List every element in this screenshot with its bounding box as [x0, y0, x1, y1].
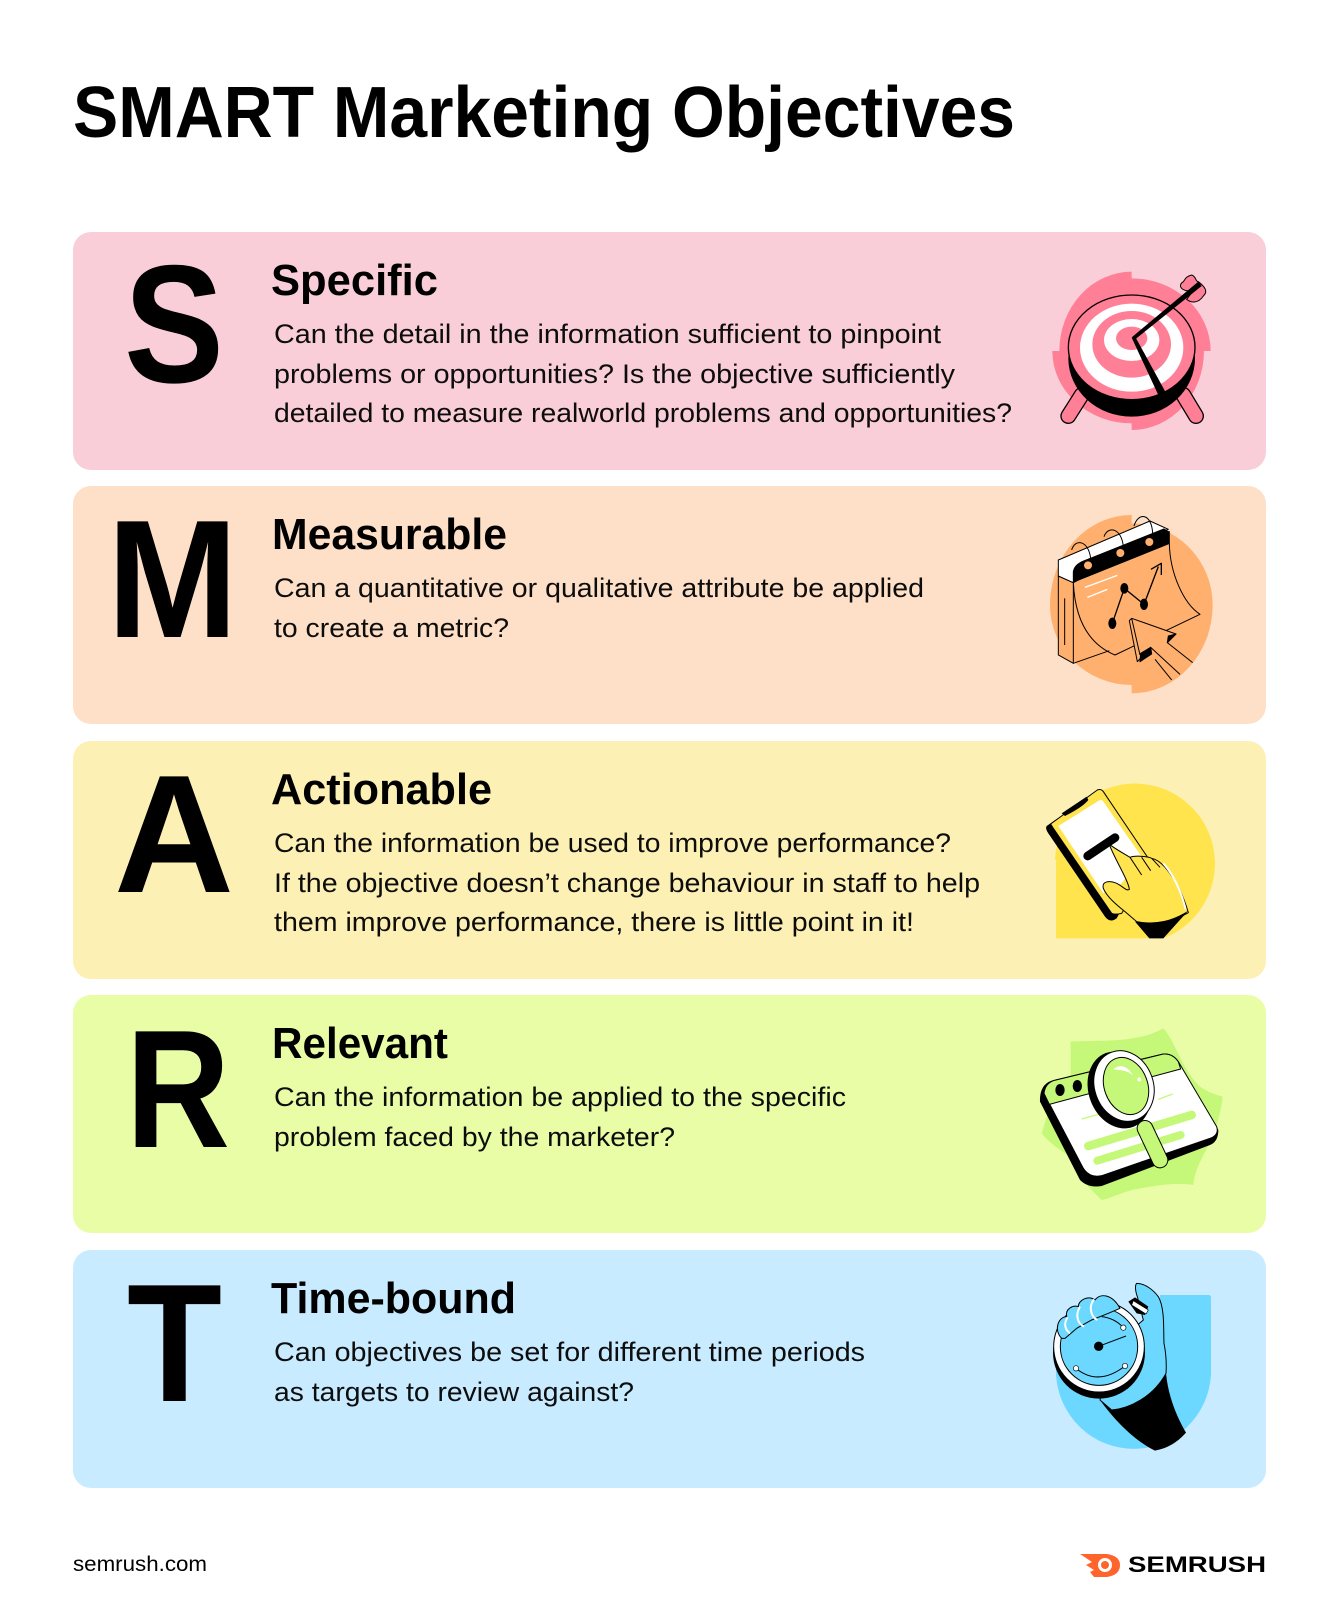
heading: Measurable: Measurable [272, 510, 507, 559]
body text: Specific [274, 319, 1012, 428]
panel: Specific [73, 230, 1266, 470]
letter S: S [124, 230, 224, 418]
panel: Measurable [73, 485, 1266, 724]
logo: Semrush [1080, 1552, 1266, 1577]
logo: Semrush: SEMRUSH [1128, 1552, 1266, 1577]
panel: Time-bound [73, 1249, 1266, 1488]
body text: Actionable [274, 828, 980, 937]
body text: Measurable: to create a metric? [274, 613, 509, 643]
body text: Specific: problems or opportunities? Is the objective sufficiently [274, 359, 956, 389]
body text: Relevant: Can the information be applied to the specific [274, 1082, 846, 1112]
heading: Time-bound: Time-bound [271, 1274, 516, 1323]
body text: Actionable: Can the information be used to improve performance? [274, 828, 951, 858]
heading: Relevant: Relevant [272, 1019, 448, 1068]
letter T: T [127, 1249, 222, 1437]
body text: Measurable: Can a quantitative or qualitative attribute be applied [274, 573, 924, 603]
body text: Specific: Can the detail in the information sufficient to pinpoint [274, 319, 942, 349]
icon: target with arrow [1052, 272, 1211, 430]
body text: Actionable: them improve performance, there is little point in it! [274, 907, 914, 937]
icon: hand holding stopwatch [1053, 1283, 1211, 1451]
body text: Actionable: If the objective doesn’t change behaviour in staff to help [274, 868, 980, 898]
icon: phone with tapping hand [1046, 784, 1215, 938]
letter M: M [107, 485, 238, 673]
body text: Time-bound: as targets to review against? [274, 1377, 634, 1407]
body text: Relevant [274, 1082, 846, 1152]
icon: browser window with magnifying glass [1040, 1028, 1223, 1200]
title: SMART Marketing Objectives [73, 73, 1015, 153]
body text: Measurable [274, 573, 924, 643]
footer: semrush.com: semrush.com [73, 1553, 207, 1576]
body text: Specific: detailed to measure realworld problems and opportunities? [274, 398, 1012, 428]
body text: Time-bound: Can objectives be set for different time periods [274, 1337, 865, 1367]
body text: Relevant: problem faced by the marketer? [274, 1122, 675, 1152]
heading: Actionable: Actionable [271, 765, 492, 814]
letter R: R [126, 995, 230, 1183]
icon: calendar with chart and cursor [1050, 515, 1213, 693]
panel: Actionable [73, 740, 1266, 979]
letter A: A [114, 740, 234, 928]
icon: Semrush flame [1080, 1554, 1120, 1577]
body text: Time-bound [274, 1337, 865, 1407]
panel: Relevant [73, 995, 1266, 1233]
heading: Specific: Specific [271, 256, 438, 305]
